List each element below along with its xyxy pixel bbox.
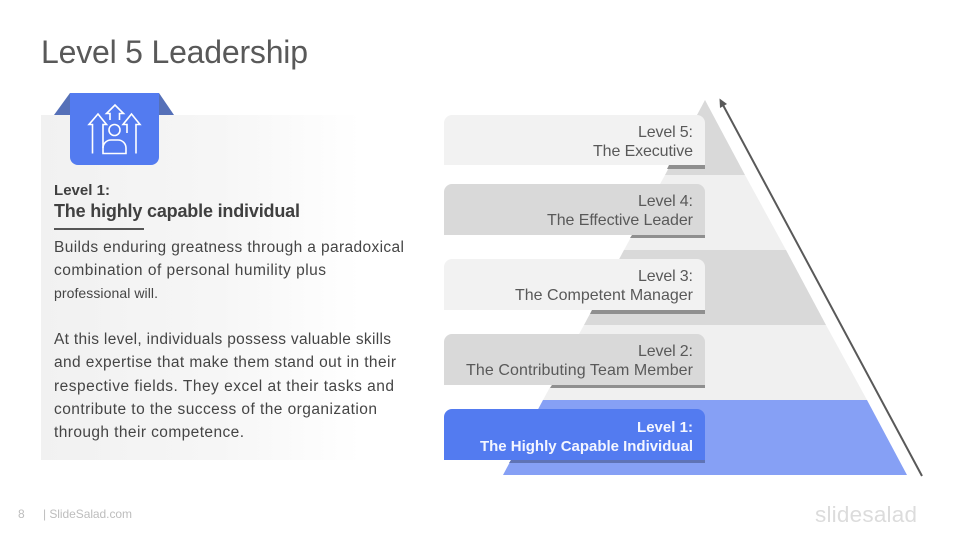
label: level 1 (active): Level 1: bbox=[637, 419, 693, 436]
label: level 2 bbox=[444, 334, 705, 388]
body text: respective fields. They excel at their tasks and bbox=[54, 378, 394, 395]
label: level 3: The Competent Manager bbox=[515, 287, 694, 304]
body text bbox=[54, 239, 404, 441]
pyramid tier 2 bbox=[543, 325, 867, 400]
panel: level 1 detail bbox=[41, 93, 404, 460]
pyramid chart bbox=[503, 100, 907, 475]
footer: site name: | SlideSalad.com bbox=[43, 507, 132, 521]
label: level 4: Level 4: bbox=[638, 193, 693, 210]
label: level 2: The Contributing Team Member bbox=[466, 362, 694, 379]
title: Level 5 Leadership bbox=[41, 34, 308, 70]
body text: Builds enduring greatness through a paradoxical bbox=[54, 239, 404, 256]
body text: At this level, individuals possess valuable skills bbox=[54, 331, 391, 348]
footer: logo wordmark: slidesalad bbox=[815, 502, 917, 527]
label: level 3: Level 3: bbox=[638, 268, 693, 285]
footer: page number: 8 bbox=[18, 507, 25, 521]
icon: person with rising arrows bbox=[89, 105, 140, 154]
body text: professional will. bbox=[54, 285, 158, 301]
underline bbox=[54, 228, 144, 230]
label: level 3 bbox=[444, 259, 705, 314]
body text: combination of personal humility plus bbox=[54, 262, 326, 279]
icon badge ribbon bbox=[54, 93, 174, 115]
pyramid tier 1 bbox=[503, 400, 907, 475]
label: level 2: Level 2: bbox=[638, 343, 693, 360]
subheading: The highly capable individual bbox=[54, 201, 300, 221]
label: level 1 (active): The Highly Capable Individual bbox=[480, 438, 693, 455]
pyramid tier 3 bbox=[584, 250, 826, 325]
subheading: Level 1: bbox=[54, 182, 110, 199]
arrow: rising levels bbox=[720, 98, 922, 476]
icon badge bbox=[70, 93, 159, 165]
body text: through their competence. bbox=[54, 424, 244, 441]
label: level 4 bbox=[444, 184, 705, 238]
body text: and expertise that make them stand out in their bbox=[54, 354, 396, 371]
label: level 1 (active) bbox=[444, 409, 705, 463]
label: level 5: Level 5: bbox=[638, 124, 693, 141]
body text: contribute to the success of the organization bbox=[54, 401, 377, 418]
subheading bbox=[54, 182, 300, 221]
label: level 4: The Effective Leader bbox=[547, 212, 694, 229]
pyramid tier 5 bbox=[665, 100, 745, 175]
pyramid tier 4 bbox=[624, 175, 786, 250]
label: level 5: The Executive bbox=[593, 143, 693, 160]
label: level 5 bbox=[444, 115, 705, 169]
panel background bbox=[41, 115, 361, 460]
